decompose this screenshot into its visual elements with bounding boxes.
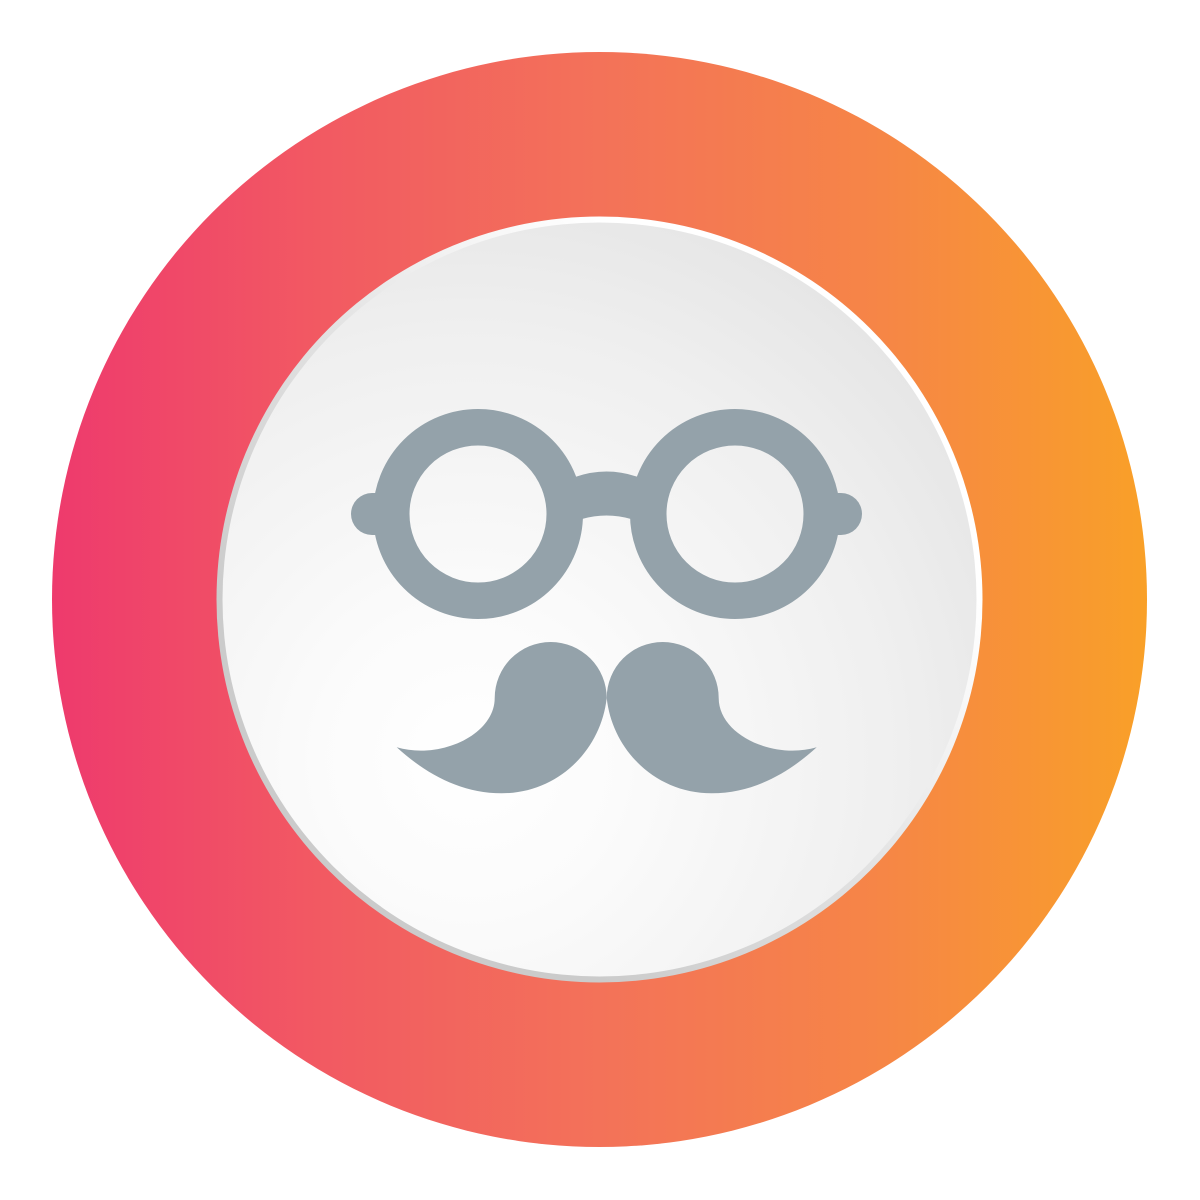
icon: glasses [351, 427, 862, 601]
icon: moustache [397, 642, 817, 793]
inner disc [216, 216, 982, 982]
